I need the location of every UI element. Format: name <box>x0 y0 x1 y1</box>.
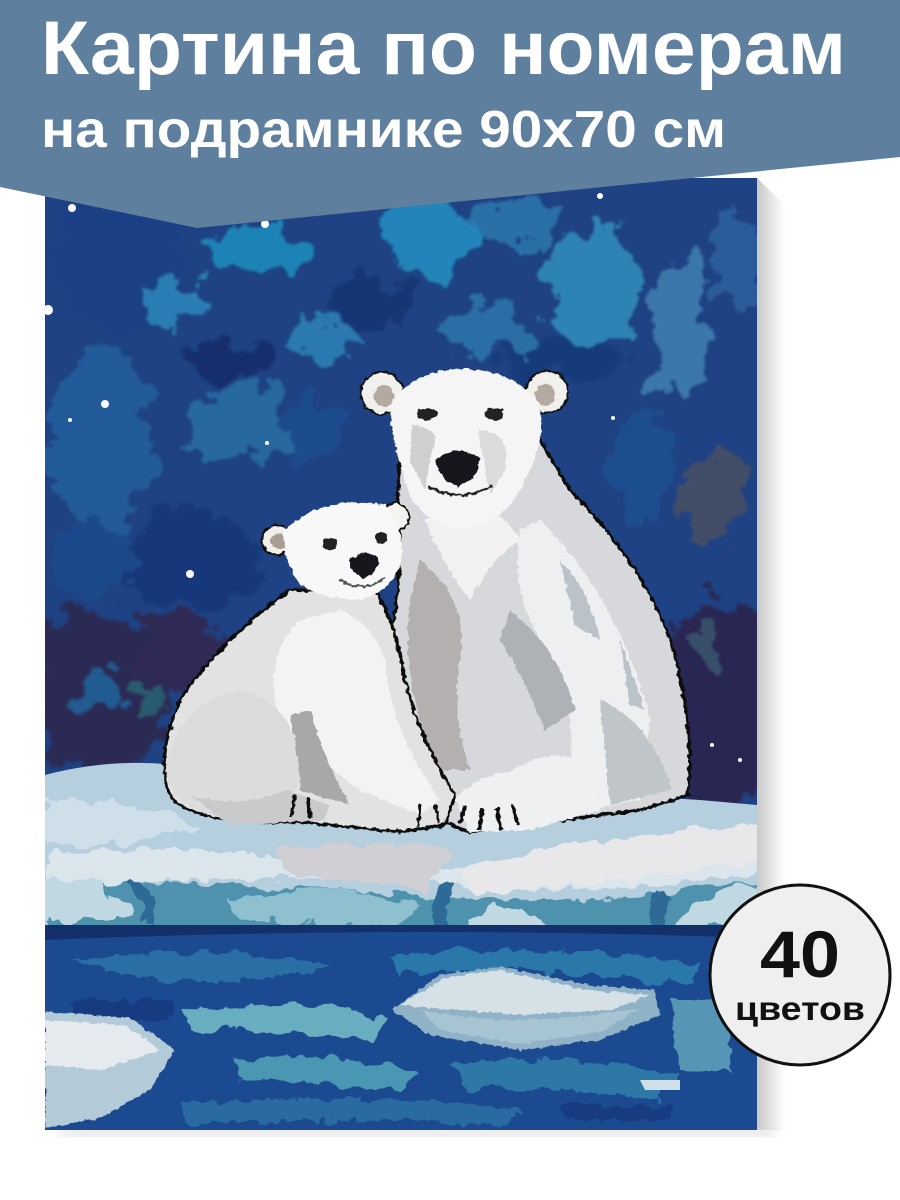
ice shelf <box>45 762 757 925</box>
painting: polar bears on ice <box>30 178 777 1130</box>
head <box>361 369 568 530</box>
night sky <box>30 178 777 818</box>
subtitle: на подрамнике 90х70 см <box>41 101 726 159</box>
canvas drop shadow <box>60 178 785 1136</box>
stars <box>43 187 742 762</box>
badge: 40 colours: цветов <box>735 990 865 1027</box>
badge: 40 colours: 40 <box>760 917 840 991</box>
large polar bear <box>361 369 690 832</box>
cub <box>164 503 455 832</box>
water <box>45 925 757 1130</box>
ice floe left <box>45 1012 175 1128</box>
cub head <box>262 503 409 600</box>
ice floe centre <box>392 967 660 1050</box>
claws <box>460 805 518 830</box>
badge: 40 colours <box>710 885 890 1065</box>
title: Картина по номерам <box>41 6 846 91</box>
header banner <box>0 0 900 228</box>
eyes and muzzle <box>417 408 504 495</box>
